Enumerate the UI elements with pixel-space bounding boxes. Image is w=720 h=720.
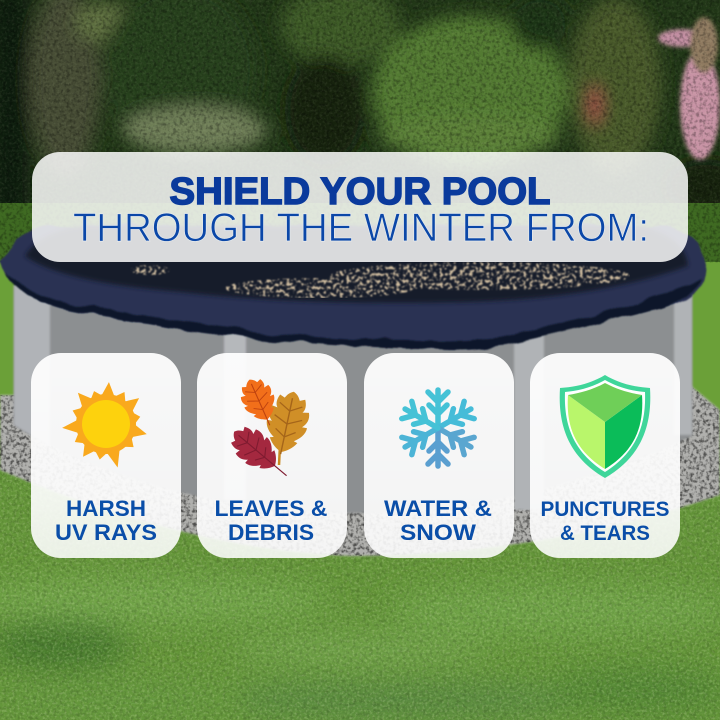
label: harsh UV rays: HARSH xyxy=(66,496,146,521)
panel: harsh UV rays xyxy=(31,353,181,558)
label: punctures and tears: PUNCTURES xyxy=(540,498,670,521)
label: harsh UV rays: UV RAYS xyxy=(55,520,157,545)
title banner xyxy=(32,152,688,262)
label: punctures and tears: & TEARS xyxy=(560,522,650,545)
hedge and side grass xyxy=(0,203,720,265)
grass patches xyxy=(0,578,720,718)
label: leaves and debris: LEAVES & xyxy=(214,496,328,521)
gravel xyxy=(0,385,720,556)
panel: punctures and tears xyxy=(530,353,680,558)
icon: autumn leaves xyxy=(223,373,314,489)
icon: sun xyxy=(62,382,148,469)
pool cover xyxy=(0,226,707,349)
title line 1: SHIELD YOUR POOL xyxy=(170,171,550,213)
title line 2: THROUGH THE WINTER FROM: xyxy=(73,206,649,250)
trees xyxy=(0,0,720,205)
label: leaves and debris: DEBRIS xyxy=(228,520,314,545)
panel: water and snow xyxy=(364,353,514,558)
icon: snowflake xyxy=(400,390,476,466)
pool wall xyxy=(14,285,692,513)
icon: shield xyxy=(560,375,650,478)
label: water and snow: SNOW xyxy=(400,520,477,545)
panel: leaves and debris xyxy=(197,353,347,558)
label: water and snow: WATER & xyxy=(384,496,492,521)
